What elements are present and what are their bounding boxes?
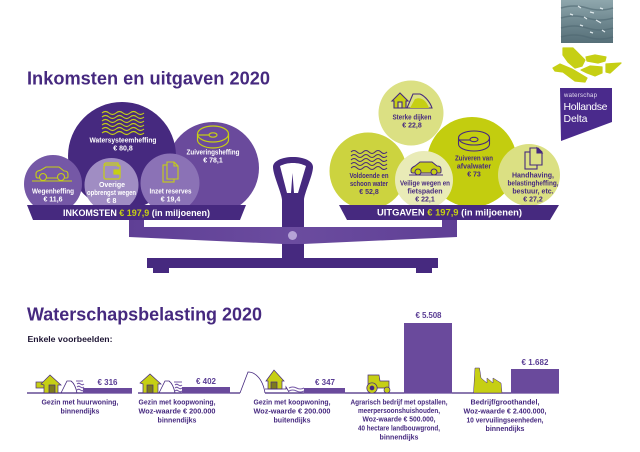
- text: circle labels inkomsten: Zuiveringsheffing: [186, 150, 240, 156]
- icon: waves watersysteem: [102, 112, 144, 134]
- title: Waterschapsbelasting 2020: Waterschapsbelasting 2020: [27, 304, 262, 324]
- text: circle labels inkomsten: [32, 138, 240, 205]
- label: Bedrijf/groothandel,: [470, 400, 540, 406]
- circle: watersysteemheffing: [68, 102, 176, 210]
- chart: example 3 koopwoning buitendijks: [230, 370, 345, 424]
- text: circle labels inkomsten: opbrengst wegen: [87, 190, 136, 197]
- text: circle labels inkomsten: Watersysteemheffing: [90, 138, 156, 144]
- circle: wegenheffing: [24, 155, 82, 205]
- text: Enkele voorbeelden: Enkele voorbeelden:: [28, 334, 113, 344]
- label: Gezin met huurwoning,: [42, 400, 119, 406]
- logo: flag waterschap Hollandse Delta: Hollandse: [564, 101, 608, 113]
- bar: [404, 323, 452, 394]
- text: circle labels uitgaven: Sterke dijken: [392, 114, 432, 122]
- text: circle labels uitgaven: afvalwater: [457, 164, 491, 170]
- icon: quay and waves: [265, 387, 304, 392]
- chart: example 1 huurwoning: [27, 375, 132, 416]
- icon: house: [140, 374, 161, 393]
- icon: documents inzet reserves: [163, 162, 178, 182]
- text: circle labels uitgaven: € 52,8: [359, 189, 379, 196]
- text: circle labels uitgaven: € 22,8: [402, 122, 422, 130]
- label: 10 vervuilingseenheden,: [466, 418, 544, 424]
- text: circle labels inkomsten: € 19,4: [161, 196, 180, 204]
- text: circle labels inkomsten: € 11,6: [43, 196, 63, 204]
- icon: wallet: [104, 163, 120, 179]
- icon: car veilige wegen: [409, 162, 443, 175]
- text: circle labels uitgaven: [350, 114, 559, 204]
- chart: example 2 koopwoning binnendijks: [138, 374, 230, 424]
- text: circle labels inkomsten: € 80,8: [113, 146, 133, 152]
- icon: disc zuivering: [198, 126, 228, 148]
- text: circle labels uitgaven: bestuur, etc.: [512, 188, 554, 196]
- panel: uitgaven circles: [330, 80, 560, 210]
- text: circle labels uitgaven: Veilige wegen en: [400, 180, 450, 188]
- chart: example 5 bedrijf groothandel: [452, 358, 559, 433]
- icon: waves voldoende: [351, 150, 387, 170]
- scale post and dial: [273, 157, 313, 258]
- value: € 5.508: [416, 311, 442, 320]
- value: € 402: [196, 377, 217, 386]
- banner: uitgaven: UITGAVEN € 197,9 (in miljoenen): [377, 208, 522, 218]
- label: Woz-waarde € 2.400.000,: [464, 408, 547, 416]
- icon: house with sign: [36, 375, 61, 393]
- text: circle labels inkomsten: Wegenheffing: [32, 188, 74, 196]
- label: binnendijks: [158, 418, 197, 424]
- text: circle labels inkomsten: Inzet reserves: [150, 188, 192, 196]
- label: buitendijks: [274, 418, 311, 424]
- logo: flag waterschap Hollandse Delta: waterschap: [563, 93, 598, 99]
- circle: overige opbrengst wegen: [84, 158, 138, 205]
- circle: zuiveren van afvalwater: [427, 117, 517, 207]
- title: Inkomsten en uitgaven 2020: Inkomsten en uitgaven 2020: [27, 68, 270, 88]
- label: Gezin met koopwoning,: [138, 400, 216, 406]
- label: Gezin met koopwoning,: [254, 400, 331, 406]
- text: circle labels uitgaven: € 27,2: [523, 196, 543, 204]
- text: circle labels uitgaven: € 22,1: [415, 196, 435, 204]
- photo: water: [561, 0, 613, 43]
- text: circle labels uitgaven: Zuiveren van: [455, 156, 493, 162]
- text: circle labels uitgaven: schoon water: [350, 181, 388, 188]
- icon: dike and waves: [61, 381, 84, 393]
- circle: handhaving: [498, 144, 560, 206]
- label: Agrarisch bedrijf met opstallen,: [350, 400, 448, 406]
- logo: flag waterschap Hollandse Delta: [560, 88, 612, 141]
- circle: veilige wegen en fietspaden: [395, 151, 453, 209]
- icon: factory: [474, 368, 502, 393]
- scale: balance: [129, 157, 457, 273]
- scale pivot: [288, 231, 297, 240]
- label: Woz-waarde € 200.000: [254, 408, 331, 416]
- chart: example 4 agrarisch bedrijf: [345, 311, 452, 442]
- text: circle labels inkomsten: Overige: [99, 182, 125, 189]
- logo: map of Hollandse Delta: [553, 48, 621, 82]
- text: circle labels uitgaven: Voldoende en: [350, 173, 388, 180]
- label: 40 hectare landbouwgrond,: [358, 426, 440, 432]
- text: circle labels uitgaven: belastingheffing,: [508, 180, 559, 188]
- banner: uitgaven: [339, 205, 559, 220]
- circle: sterke dijken: [378, 80, 444, 146]
- logo: flag waterschap Hollandse Delta: Delta: [564, 113, 588, 125]
- text: circle labels inkomsten: € 8: [107, 198, 116, 205]
- panel: inkomsten circles: [24, 102, 259, 214]
- banner: inkomsten: [27, 205, 246, 220]
- bar: [83, 388, 132, 394]
- banner: inkomsten: INKOMSTEN € 197,9 (in miljoenen): [63, 208, 210, 218]
- label: binnendijks: [486, 426, 525, 433]
- bar: [511, 369, 559, 394]
- circle: inzet reserves: [140, 154, 200, 205]
- label: Woz-waarde € 200.000: [138, 408, 216, 416]
- text: circle labels uitgaven: Handhaving,: [512, 172, 554, 180]
- text: circle labels uitgaven: fietspaden: [407, 188, 443, 196]
- icon: disc zuiveren: [458, 131, 490, 151]
- circle: voldoende en schoon water: [330, 132, 406, 210]
- label: binnendijks: [61, 408, 100, 416]
- text: circle labels uitgaven: € 73: [467, 172, 481, 178]
- bar: [304, 388, 345, 394]
- label: meerpersoonshuishouden,: [358, 408, 440, 415]
- value: € 1.682: [522, 358, 549, 367]
- scale beam: [129, 220, 457, 244]
- icon: house and dike: [392, 93, 432, 108]
- icon: dike and waves: [159, 381, 182, 393]
- value: € 316: [98, 378, 118, 387]
- value: € 347: [315, 378, 336, 387]
- icon: house: [266, 370, 284, 389]
- bar: [182, 387, 230, 394]
- icon: dike: [240, 372, 265, 393]
- circle: zuiveringsheffing: [174, 122, 259, 205]
- icon: documents handhaving: [525, 148, 542, 169]
- scale base: [147, 258, 438, 273]
- label: binnendijks: [380, 434, 419, 442]
- text: circle labels inkomsten: € 78,1: [203, 158, 223, 164]
- icon: car wegenheffing: [32, 167, 72, 181]
- icon: tractor: [367, 375, 390, 393]
- label: Woz-waarde € 500.000,: [362, 416, 436, 424]
